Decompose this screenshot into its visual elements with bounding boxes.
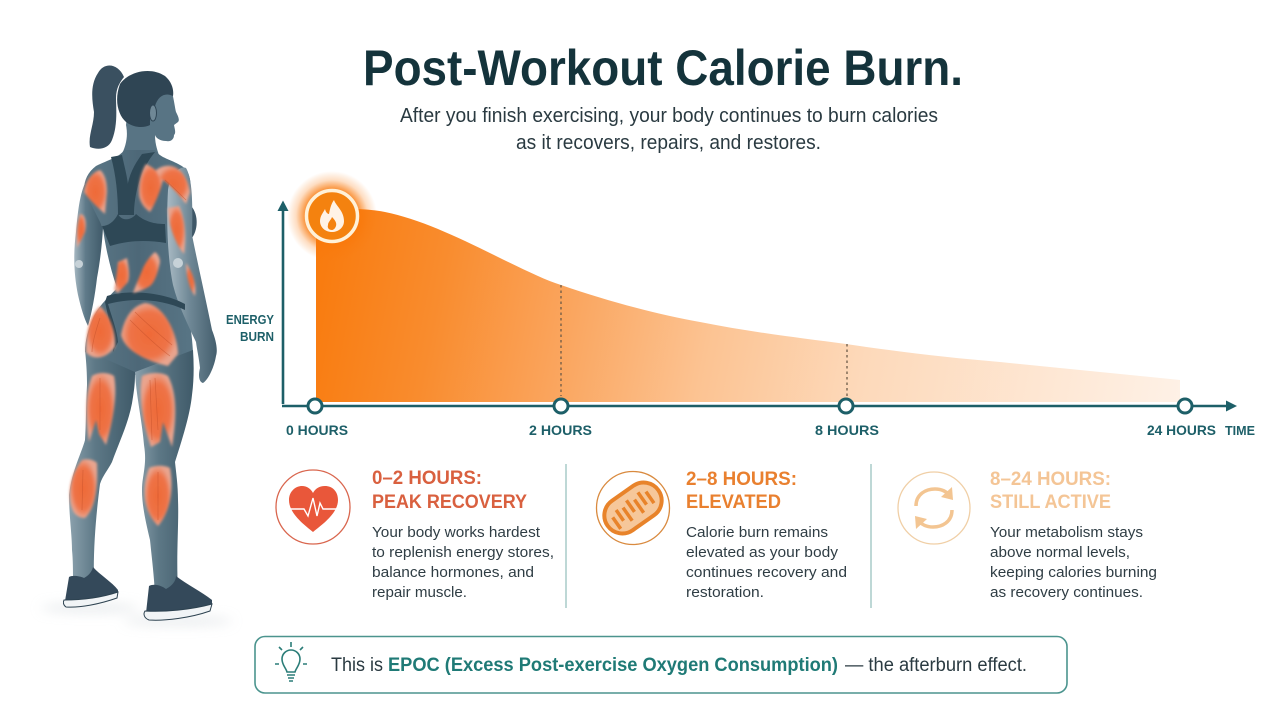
heading [686,468,797,513]
muscle fibre lines [82,180,186,520]
y axis [278,200,288,404]
ponytail [90,66,124,149]
area chart: energy burn over time [226,171,1255,438]
heading: 2–8 HOURS: [686,468,797,490]
body text: restoration. [686,584,764,601]
icon: mitochondrion [596,472,670,544]
callout: EPOC [255,636,1067,693]
body text: Your metabolism stays [990,524,1143,541]
elbow highlights [75,258,183,268]
right leg [135,350,194,595]
heading: ELEVATED [686,491,781,513]
body text: Calorie burn remains [686,524,828,541]
left arm [74,178,103,326]
heading: PEAK RECOVERY [372,491,527,513]
shorts band [105,292,185,352]
callout text: This is [331,655,383,676]
icon: heart with pulse [276,470,350,544]
time labels: 0 HOURS [286,422,348,438]
body text: balance hormones, and [372,564,534,581]
floor shadow [40,604,233,625]
divider [870,464,872,608]
body text [990,524,1157,601]
body text: Your body works hardest [372,524,541,541]
body text: above normal levels, [990,544,1130,561]
time markers dotted [561,285,847,396]
ear [150,105,156,121]
title: Post-Workout Calorie Burn. [363,40,963,96]
muscles [70,164,195,526]
panel: 2-8 hours elevated [596,468,847,601]
time labels: 2 HOURS [529,422,592,438]
heading: STILL ACTIVE [990,491,1111,513]
body text: continues recovery and [686,564,847,581]
body text [372,524,554,601]
illustration: female figure from behind with highlighted muscles [40,66,233,625]
time labels: TIME [1225,423,1255,438]
subtitle: as it recovers, repairs, and restores. [516,132,821,154]
body text: to replenish energy stores, [372,544,554,561]
heading [372,467,527,513]
callout text [331,655,1027,676]
icon: light bulb [275,642,307,681]
body text: repair muscle. [372,584,467,601]
right shoe [144,576,212,620]
axis label: energy burn: BURN [240,329,274,344]
callout text: — the afterburn effect. [845,655,1027,676]
body text [686,524,847,601]
body text: elevated as your body [686,544,839,561]
icon: flame badge [287,171,377,261]
callout text: EPOC (Excess Post-exercise Oxygen Consumption) [388,655,838,676]
left shoe [63,567,118,607]
torso [84,150,193,375]
right arm [167,167,217,383]
neck and face [120,90,179,158]
heading: 8–24 HOURS: [990,468,1111,490]
time labels: 24 HOURS [1147,422,1216,438]
panel: 0-2 hours peak recovery [276,467,554,601]
left leg [69,350,135,582]
burn curve area [316,209,1180,402]
axis nodes [308,399,1192,413]
heading [990,468,1111,513]
icon: cycle arrows [898,472,970,544]
hair [117,71,173,127]
heading: 0–2 HOURS: [372,467,482,489]
time labels [286,422,1255,438]
chest edge [190,205,197,238]
axis label: energy burn: ENERGY [226,312,274,327]
body text: as recovery continues. [990,584,1143,601]
callout border [255,636,1067,693]
divider [565,464,567,608]
time labels: 8 HOURS [815,422,879,438]
subtitle: After you finish exercising, your body continues to burn calories [400,105,938,127]
sports bra [102,152,166,246]
x axis [282,400,1237,412]
panel: 8-24 hours still active [898,468,1157,601]
subtitle [400,105,938,154]
body text: keeping calories burning [990,564,1157,581]
axis label: energy burn [226,312,274,344]
